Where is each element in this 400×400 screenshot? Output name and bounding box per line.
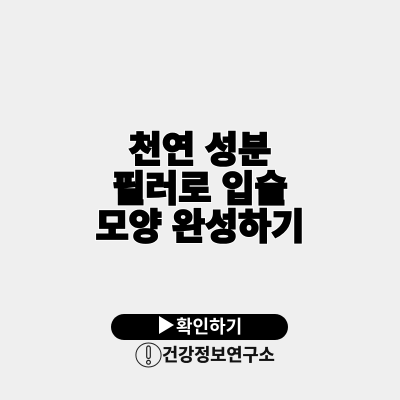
brand name: 건강정보연구소 — [162, 345, 275, 365]
title — [96, 129, 304, 247]
button: confirm — [111, 314, 288, 340]
icon: exclamation mark in circle — [135, 342, 162, 368]
title halo: 필러로 입술 — [112, 168, 288, 208]
button: confirm: 확인하기 — [176, 317, 242, 337]
title: 필러로 입술 — [112, 168, 288, 208]
title halo: 천연 성분 — [129, 129, 271, 170]
title: 모양 완성하기 — [96, 206, 304, 247]
title: 천연 성분 — [129, 129, 271, 170]
title halo — [95, 129, 304, 247]
title halo: 모양 완성하기 — [96, 206, 304, 247]
